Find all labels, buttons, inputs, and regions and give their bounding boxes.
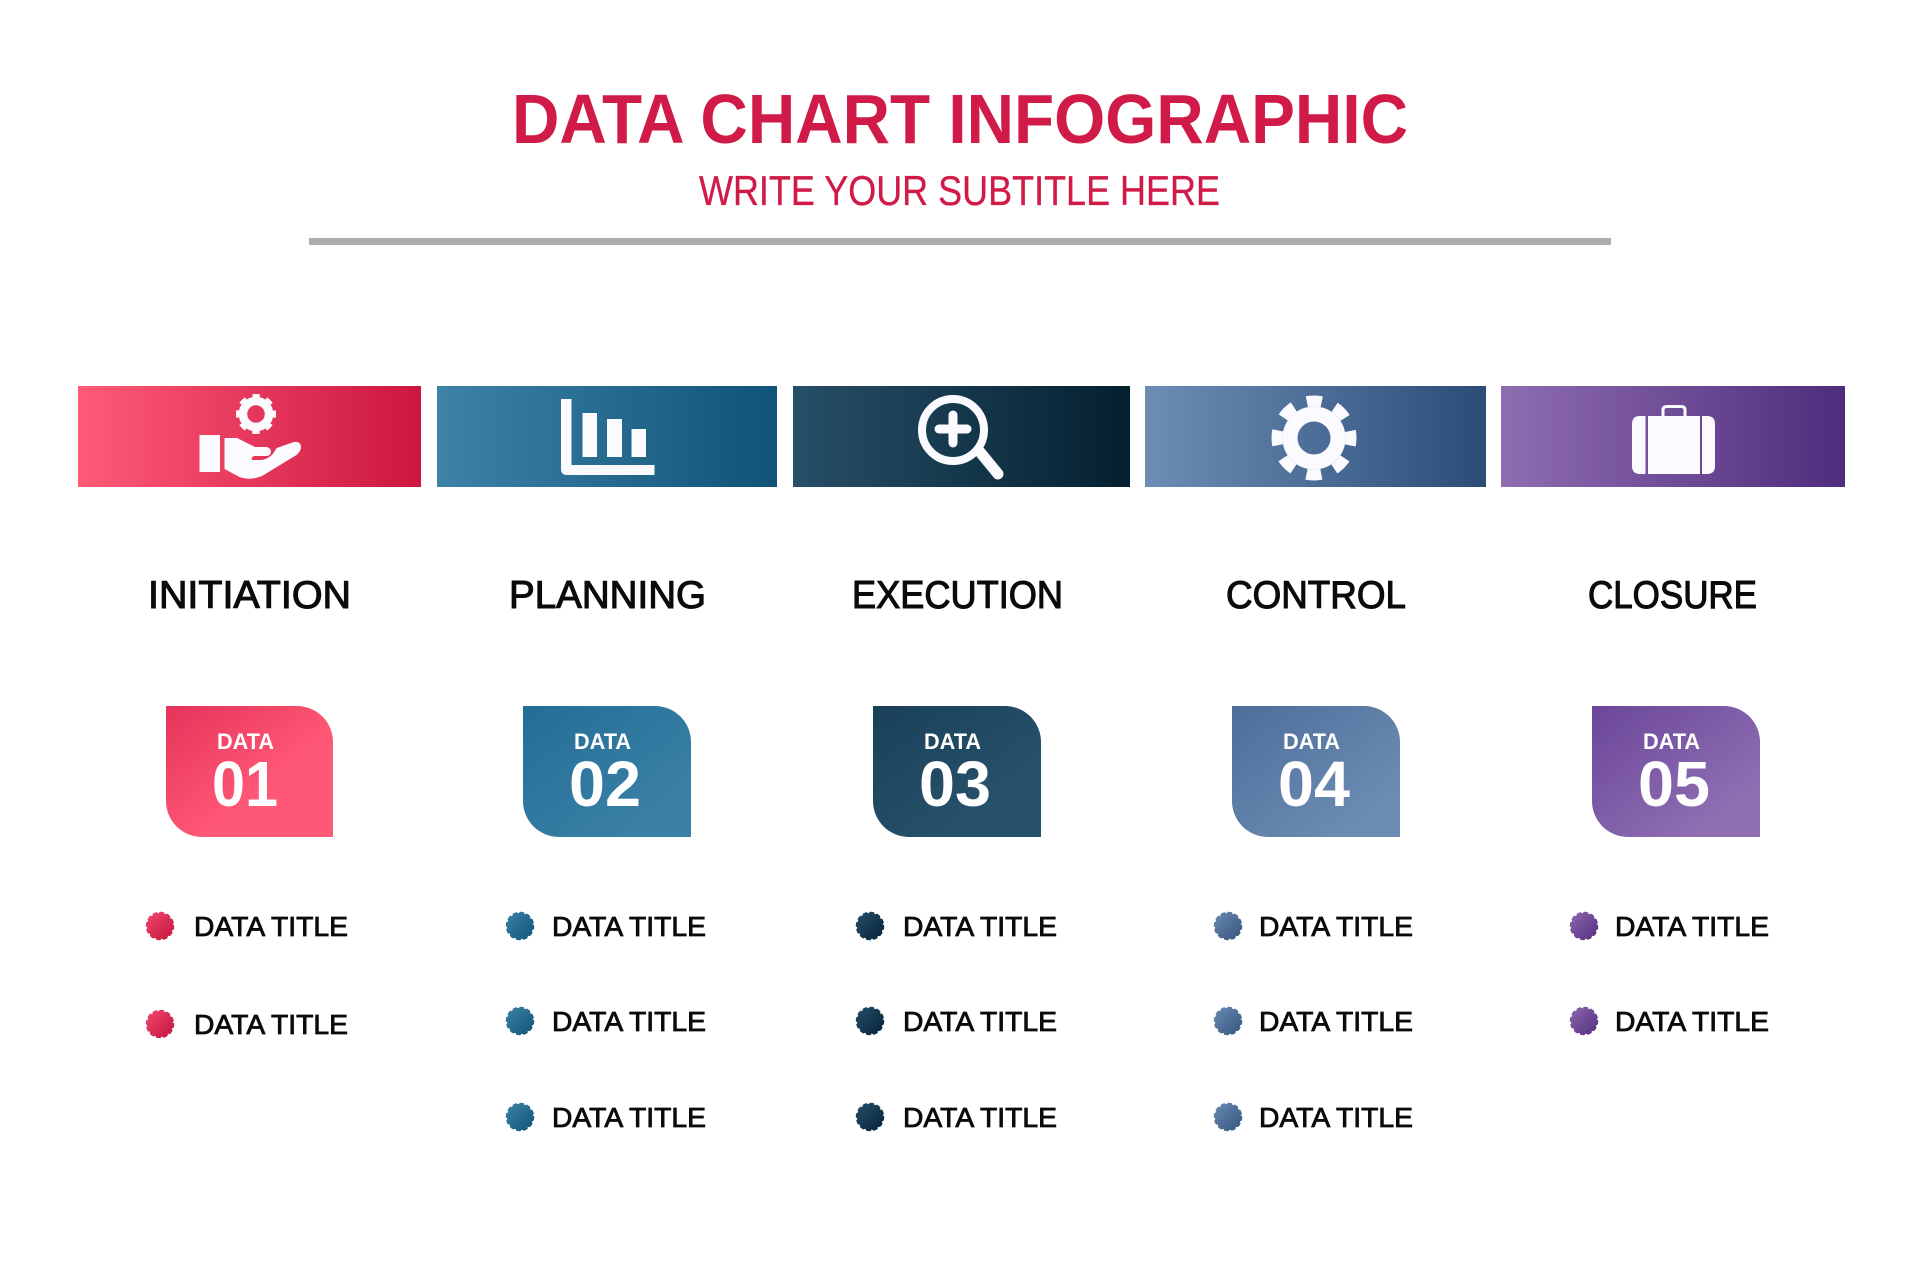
title: DATA CHART INFOGRAPHIC bbox=[512, 80, 1408, 158]
column 5: closure bbox=[1501, 386, 1845, 1037]
heading: execution: EXECUTION bbox=[852, 574, 1063, 617]
column 1: initiation bbox=[78, 386, 421, 1040]
icon: bar chart bbox=[561, 399, 654, 475]
data tile 04: DATA bbox=[1283, 729, 1340, 754]
list item: DATA TITLE bbox=[194, 911, 348, 942]
list item: DATA TITLE bbox=[1615, 911, 1769, 942]
header bar: execution bbox=[793, 386, 1130, 487]
data tile 02 bbox=[523, 706, 691, 837]
data tile 01: 01 bbox=[212, 748, 278, 820]
list item: DATA TITLE bbox=[903, 1006, 1057, 1037]
list item: DATA TITLE bbox=[552, 1006, 706, 1037]
data tile 05 bbox=[1592, 706, 1760, 837]
heading: initiation: INITIATION bbox=[148, 574, 351, 617]
data tile 03 bbox=[873, 706, 1041, 837]
heading: closure: CLOSURE bbox=[1588, 574, 1757, 617]
list item: DATA TITLE bbox=[1259, 911, 1413, 942]
icon: magnifier with plus bbox=[922, 399, 998, 474]
icon: gear bbox=[1277, 401, 1351, 475]
heading: control: CONTROL bbox=[1226, 574, 1406, 617]
header bar: planning bbox=[437, 386, 777, 487]
subtitle: WRITE YOUR SUBTITLE HERE bbox=[699, 167, 1220, 214]
column 3: execution bbox=[793, 386, 1130, 1133]
column 2: planning bbox=[437, 386, 777, 1133]
data tile 01 bbox=[166, 706, 333, 837]
list item: DATA TITLE bbox=[194, 1009, 348, 1040]
icon: briefcase bbox=[1632, 406, 1715, 474]
data tile 04 bbox=[1232, 706, 1400, 837]
icon: hand holding gear bbox=[200, 396, 301, 479]
header bar: control bbox=[1145, 386, 1486, 487]
list item: DATA TITLE bbox=[1259, 1102, 1413, 1133]
header bar: initiation bbox=[78, 386, 421, 487]
data tile 03: 03 bbox=[919, 748, 991, 820]
list item: DATA TITLE bbox=[1259, 1006, 1413, 1037]
data tile 04: 04 bbox=[1278, 748, 1350, 820]
data tile 05: 05 bbox=[1638, 748, 1710, 820]
heading: planning: PLANNING bbox=[509, 574, 706, 617]
data tile 02: DATA bbox=[574, 729, 631, 754]
header bar: closure bbox=[1501, 386, 1845, 487]
list item: DATA TITLE bbox=[1615, 1006, 1769, 1037]
list item: DATA TITLE bbox=[552, 911, 706, 942]
data tile 01: DATA bbox=[217, 729, 274, 754]
column 4: control bbox=[1145, 386, 1486, 1133]
data tile 02: 02 bbox=[569, 748, 641, 820]
data tile 05: DATA bbox=[1643, 729, 1700, 754]
list item: DATA TITLE bbox=[552, 1102, 706, 1133]
list item: DATA TITLE bbox=[903, 911, 1057, 942]
list item: DATA TITLE bbox=[903, 1102, 1057, 1133]
data tile 03: DATA bbox=[924, 729, 981, 754]
